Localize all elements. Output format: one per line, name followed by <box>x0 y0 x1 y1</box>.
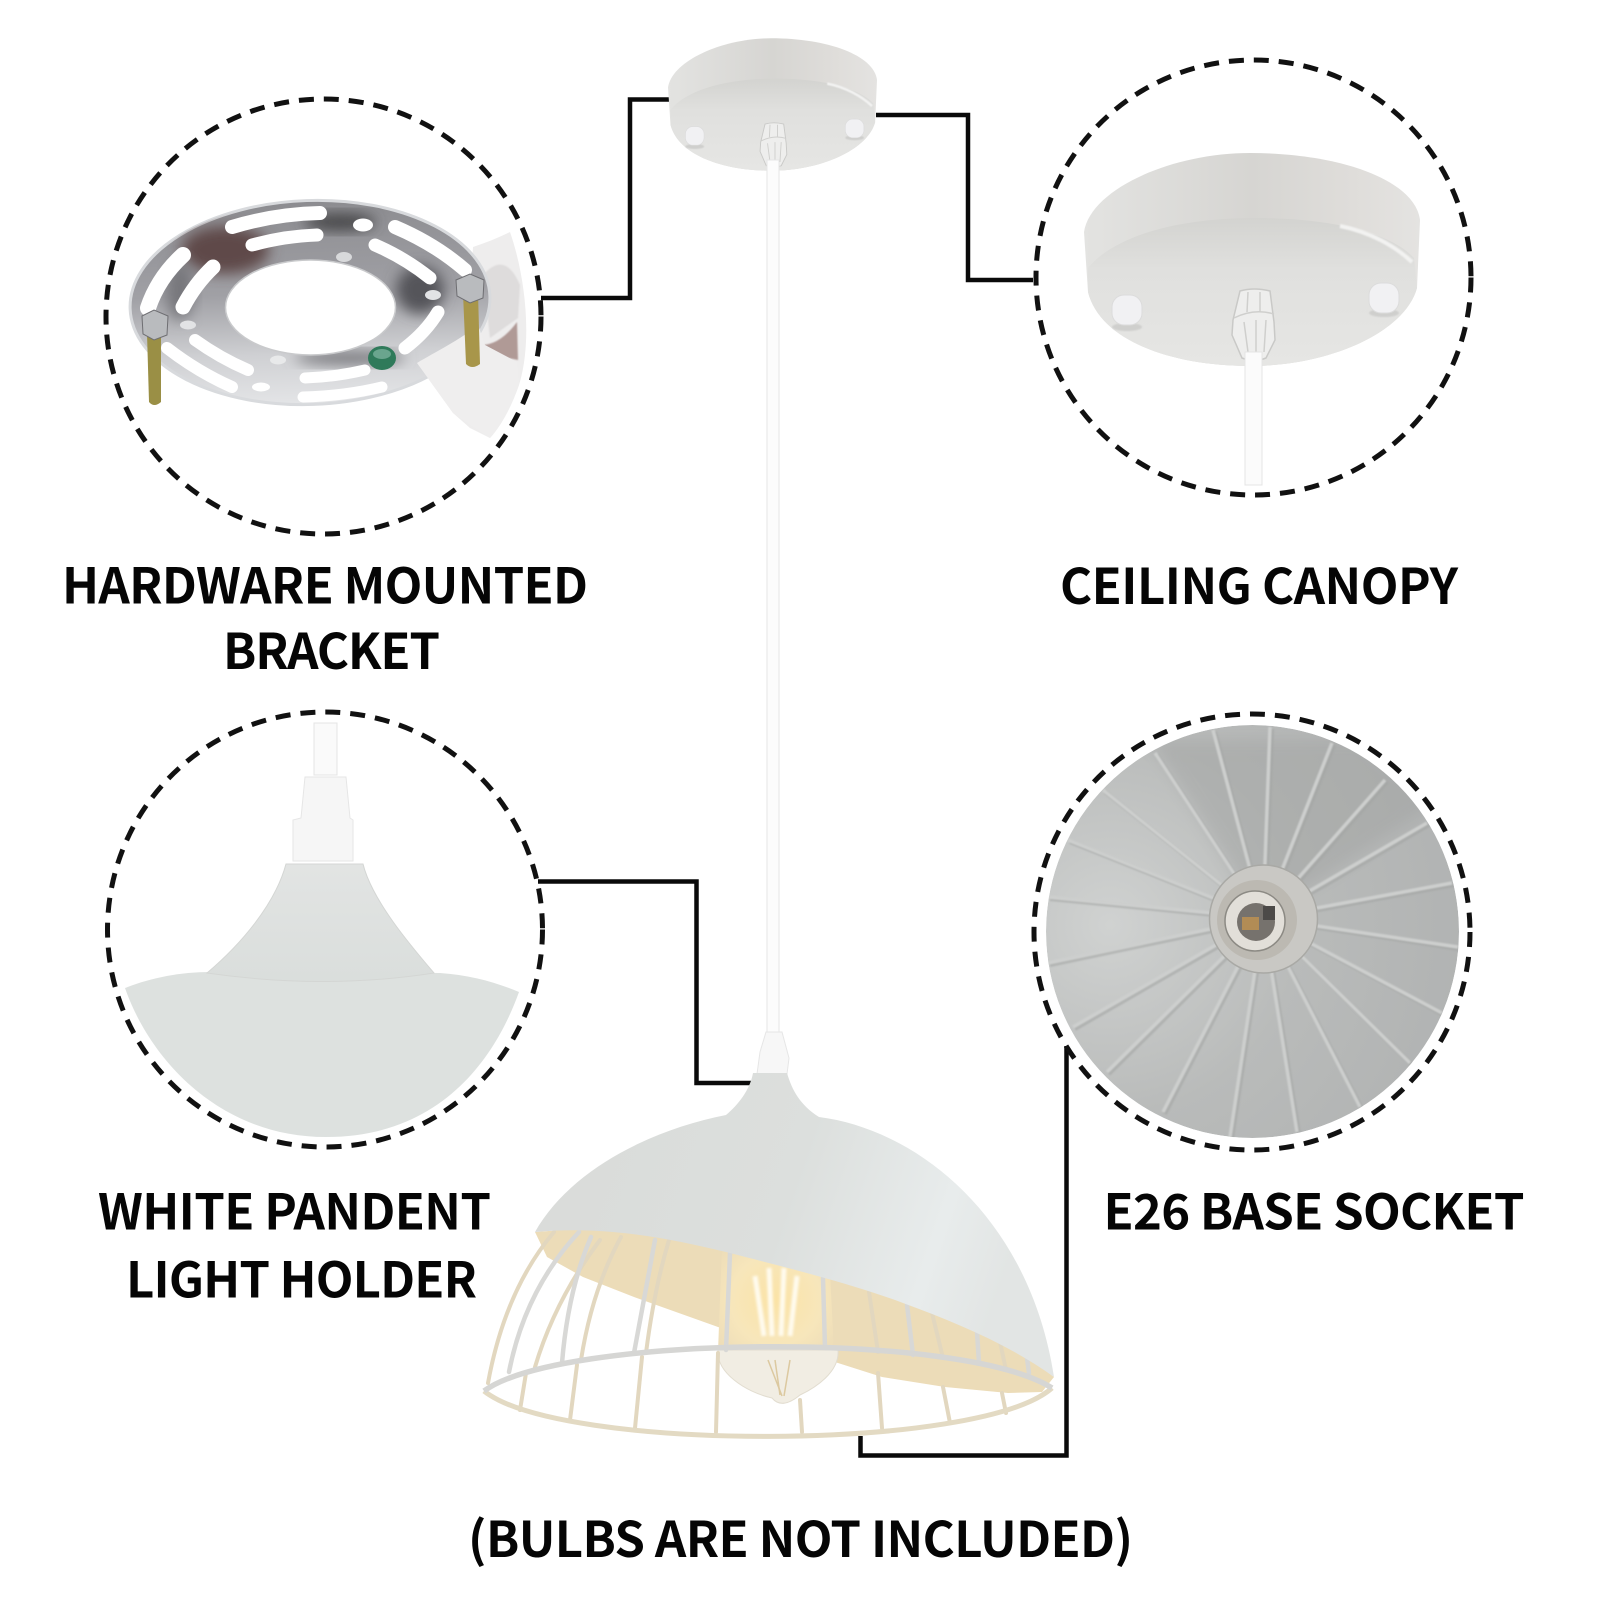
panel: E26 base socket <box>1034 714 1470 1150</box>
heading: ceiling canopy: CEILING CANOPY <box>1060 548 1459 619</box>
heading: white pandent light holder: LIGHT HOLDER <box>126 1242 477 1312</box>
icon: right bolt <box>456 274 484 367</box>
icon: holder cone <box>207 864 434 982</box>
heading: hardware mounted bracket <box>62 548 588 684</box>
connector: bracket to small canopy <box>541 100 670 298</box>
dashed circle: socket <box>1034 714 1470 1150</box>
connector: socket circle to lamp rim <box>860 1046 1066 1456</box>
icon: main cable <box>767 160 779 1040</box>
icon: canopy cable <box>1245 352 1262 485</box>
heading: hardware mounted bracket: BRACKET <box>223 613 440 684</box>
icon: glow around bulb <box>718 1245 834 1352</box>
panel: main pendant lamp <box>484 160 1054 1436</box>
icon: ceiling canopy body <box>1084 153 1420 366</box>
icon: green screw <box>368 346 396 370</box>
heading: E26 base socket: E26 BASE SOCKET <box>1104 1174 1524 1244</box>
icon: metal mounting plate <box>127 194 493 411</box>
icon: shade interior <box>535 1220 1054 1393</box>
panel: white pendent light holder <box>108 712 542 1147</box>
icon: left bolt <box>142 310 168 405</box>
connector: holder circle to lamp cone <box>538 882 752 1083</box>
dashed circle: holder <box>108 712 542 1147</box>
icon: cap strain relief <box>757 1032 789 1074</box>
dashed circle: canopy <box>1036 60 1471 495</box>
panel: hardware mounted bracket <box>106 99 541 534</box>
dashed circle: bracket <box>106 99 541 534</box>
connector: small canopy to ceiling canopy circle <box>876 115 1033 280</box>
note: bulbs are not included: (BULBS ARE NOT INCLUDED) <box>468 1501 1133 1572</box>
icon: cage rim <box>484 1347 1052 1436</box>
icon: lamp socket <box>1210 865 1318 973</box>
panel: ceiling canopy <box>1036 60 1471 495</box>
heading: white pandent light holder <box>98 1174 491 1312</box>
heading: hardware mounted bracket: HARDWARE MOUNTED <box>62 548 588 618</box>
icon: bulb <box>718 1268 838 1403</box>
icon: cage ribs <box>488 1232 1029 1432</box>
icon: holder dome <box>125 972 519 1137</box>
icon: reflector disk with ribs <box>1046 725 1460 1139</box>
icon: holder cable <box>314 723 337 775</box>
icon: cloth holding bracket <box>417 232 526 438</box>
panel: small canopy on main lamp <box>668 38 877 171</box>
icon: dome shade <box>535 1073 1054 1377</box>
icon: cloth over plate <box>417 325 519 438</box>
icon: holder strain relief <box>293 777 353 861</box>
heading: white pandent light holder: WHITE PANDENT <box>98 1174 491 1244</box>
